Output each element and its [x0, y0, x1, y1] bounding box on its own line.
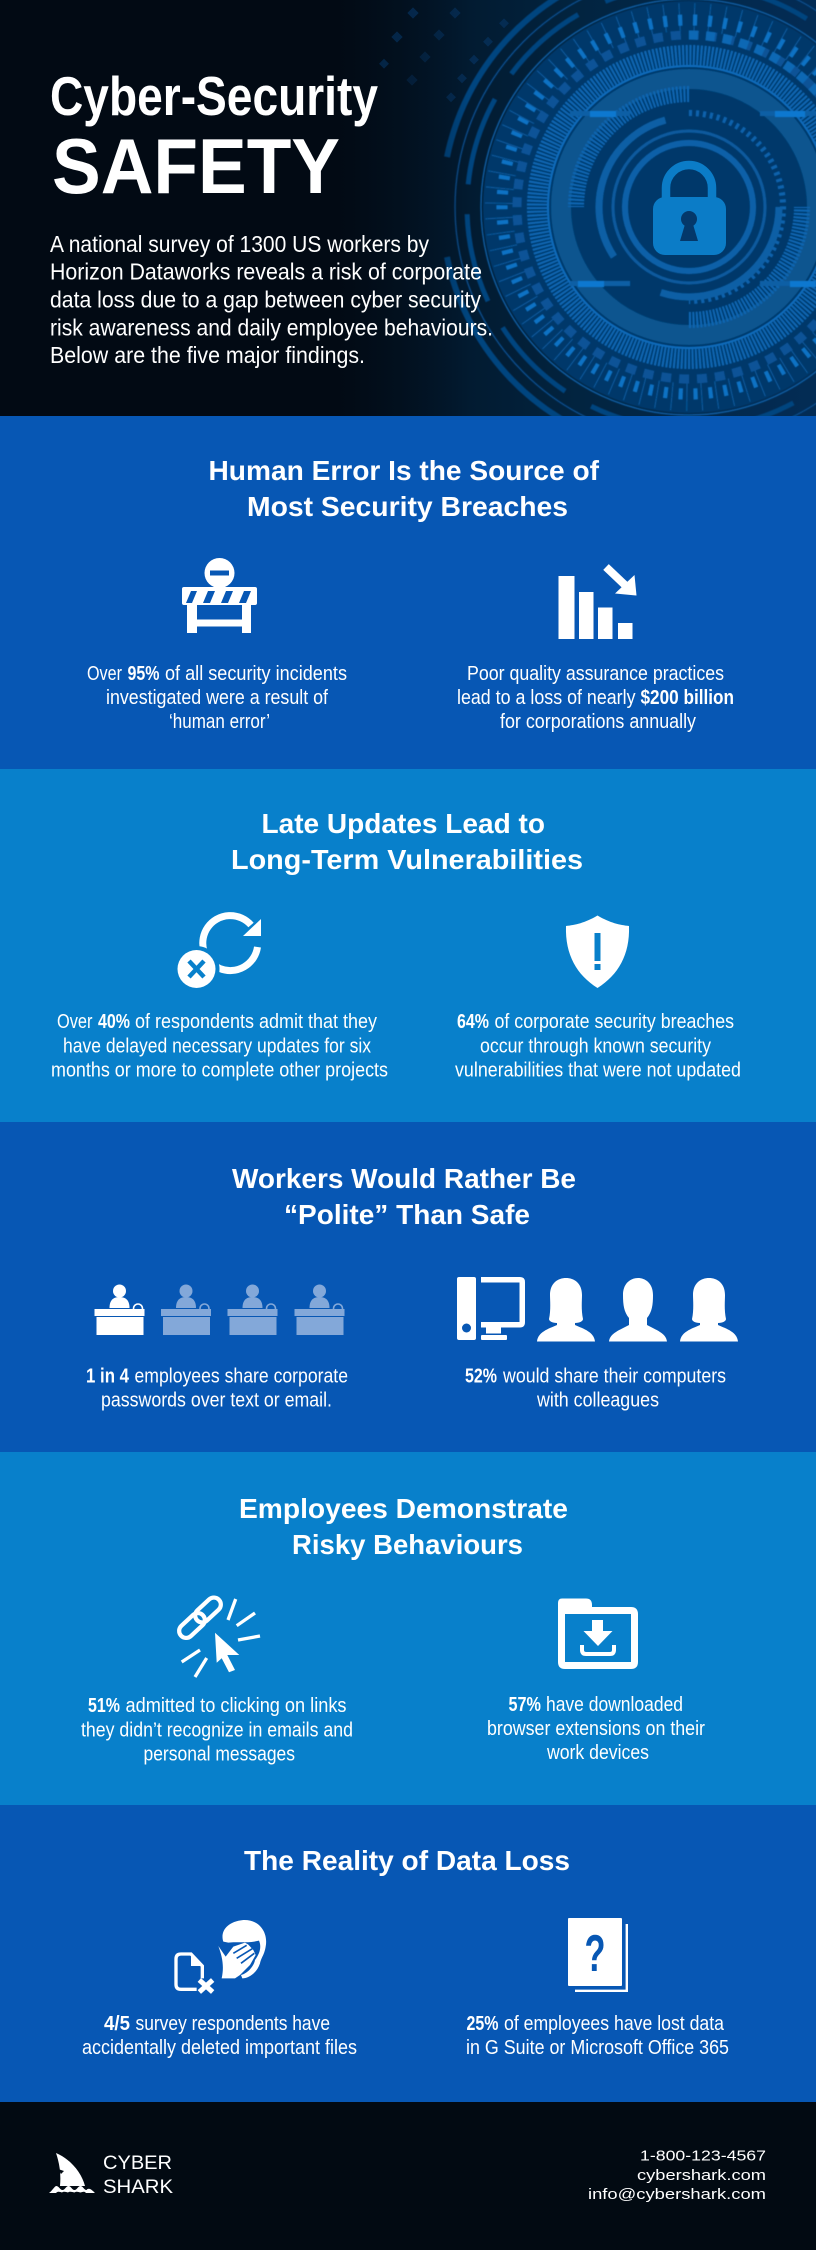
text: 51% clicked links: admitted to clicking on links: [126, 1695, 346, 1717]
text: 64% known vulnerabilities: 64%: [457, 1011, 489, 1033]
hero image: concentric digital security rings: [379, 0, 816, 416]
text: 52% share computers: [465, 1366, 726, 1412]
heading: human error: Human Error Is the Source of: [208, 455, 600, 486]
panel: data loss: [0, 1805, 816, 2102]
text: 64% known vulnerabilities: [455, 1011, 741, 1082]
heading: polite: “Polite” Than Safe: [284, 1199, 530, 1230]
text: 25% lost data: in G Suite or Microsoft Office 365: [466, 2037, 729, 2059]
panel: human error: [0, 416, 816, 769]
contact details: [588, 2148, 766, 2203]
heading: polite: Workers Would Rather Be: [232, 1163, 576, 1194]
text: $200 billion: Poor quality assurance practices: [467, 663, 724, 685]
text: 51% clicked links: 51%: [88, 1695, 120, 1717]
text: 4/5 deleted files: survey respondents have: [136, 2013, 330, 2035]
text: 52% share computers: with colleagues: [536, 1390, 659, 1412]
text: 95% human error: [87, 663, 347, 733]
contact details: cybershark.com: [637, 2167, 766, 2184]
text: $200 billion: for corporations annually: [500, 711, 696, 733]
logo: cyber shark: SHARK: [103, 2176, 173, 2198]
intro paragraph: Below are the five major findings.: [50, 342, 365, 368]
heading: human error: Most Security Breaches: [247, 491, 568, 522]
icon: download folder: [558, 1598, 638, 1669]
icon: declining bar chart: [558, 567, 636, 639]
heading: polite: [232, 1163, 576, 1230]
text: 1 in 4 share passwords: employees share corporate: [134, 1366, 348, 1388]
text: 64% known vulnerabilities: of corporate security breaches: [494, 1011, 734, 1033]
text: 64% known vulnerabilities: occur through known security: [480, 1036, 711, 1058]
icon: warning shield: [566, 916, 629, 988]
heading: risky behaviours: Risky Behaviours: [292, 1529, 523, 1560]
text: 4/5 deleted files: accidentally deleted important files: [82, 2037, 357, 2059]
contact details: info@cybershark.com: [588, 2186, 766, 2203]
text: 57% browser extensions: browser extensions on their: [487, 1718, 705, 1740]
panel: risky behaviours: [0, 1452, 816, 1805]
intro paragraph: [50, 231, 493, 368]
text: 57% browser extensions: have downloaded: [546, 1694, 683, 1716]
text: 4/5 deleted files: [82, 2013, 357, 2059]
text: $200 billion: $200 billion: [640, 687, 734, 709]
icon: deleted file and person covering face: [176, 1920, 266, 1992]
heading: human error: [208, 455, 600, 522]
panel: polite: [0, 1122, 816, 1452]
text: 40% delayed updates: of respondents admit that they: [135, 1011, 377, 1033]
text: 95% human error: 95%: [128, 663, 160, 685]
heading: data loss: The Reality of Data Loss: [244, 1845, 570, 1876]
icon: clicking a link: [176, 1595, 260, 1677]
text: 57% browser extensions: work devices: [546, 1742, 649, 1764]
title: SAFETY: [52, 122, 340, 210]
heading: late updates: Late Updates Lead to: [262, 808, 545, 839]
text: 52% share computers: would share their computers: [502, 1366, 726, 1388]
text: 40% delayed updates: have delayed necessary updates for six: [63, 1036, 371, 1058]
text: 95% human error: investigated were a result of: [106, 687, 328, 709]
text: 40% delayed updates: [51, 1011, 388, 1082]
text: 1 in 4 share passwords: passwords over text or email.: [101, 1390, 332, 1412]
icon: book with question mark: ?: [584, 1925, 606, 1983]
heading: late updates: [231, 808, 583, 875]
text: 25% lost data: [466, 2013, 729, 2059]
text: 95% human error: of all security incidents: [165, 663, 347, 685]
intro paragraph: A national survey of 1300 US workers by: [50, 231, 429, 257]
text: 57% browser extensions: [487, 1694, 705, 1764]
title: [50, 65, 378, 210]
text: 57% browser extensions: 57%: [508, 1694, 541, 1716]
title: Cyber-Security: [50, 65, 378, 127]
text: 4/5 deleted files: 4/5: [104, 2013, 130, 2035]
heading: risky behaviours: Employees Demonstrate: [239, 1493, 568, 1524]
heading: risky behaviours: [239, 1493, 568, 1560]
text: 40% delayed updates: months or more to complete other projects: [51, 1060, 388, 1082]
text: 95% human error: ‘human error’: [169, 711, 270, 733]
icon: failed update: [174, 916, 261, 992]
text: $200 billion: [457, 663, 734, 733]
icon: road barrier: [182, 558, 257, 633]
text: 51% clicked links: [81, 1695, 353, 1766]
text: 51% clicked links: personal messages: [144, 1744, 295, 1766]
logo: cyber shark: [49, 2152, 173, 2198]
text: 40% delayed updates: 40%: [98, 1011, 130, 1033]
icon: computer and three colleagues: [457, 1277, 738, 1342]
text: 52% share computers: 52%: [465, 1366, 497, 1388]
intro paragraph: data loss due to a gap between cyber security: [50, 286, 481, 312]
panel: footer: [0, 2102, 816, 2250]
logo: cyber shark: CYBER: [103, 2152, 172, 2174]
text: 64% known vulnerabilities: vulnerabilities that were not updated: [455, 1060, 741, 1082]
text: $200 billion: lead to a loss of nearly: [457, 687, 636, 709]
icon: padlock: [653, 165, 726, 255]
panel: hero header: [50, 0, 816, 416]
intro paragraph: risk awareness and daily employee behaviours.: [50, 314, 493, 340]
intro paragraph: Horizon Dataworks reveals a risk of corporate: [50, 258, 482, 284]
text: 40% delayed updates: Over: [57, 1011, 93, 1033]
text: 1 in 4 share passwords: 1 in 4: [86, 1366, 130, 1388]
text: 95% human error: Over: [87, 663, 122, 685]
text: 51% clicked links: they didn’t recognize in emails and: [81, 1720, 353, 1742]
panel: late updates: [0, 769, 816, 1122]
icon: four employees at desks, one highlighted: [94, 1284, 344, 1335]
heading: late updates: Long-Term Vulnerabilities: [231, 844, 583, 875]
text: 25% lost data: of employees have lost data: [504, 2013, 725, 2035]
text: 25% lost data: 25%: [466, 2013, 499, 2035]
contact details: 1-800-123-4567: [640, 2148, 766, 2164]
icon: book with question mark: [568, 1918, 627, 1991]
text: 1 in 4 share passwords: [86, 1366, 348, 1412]
